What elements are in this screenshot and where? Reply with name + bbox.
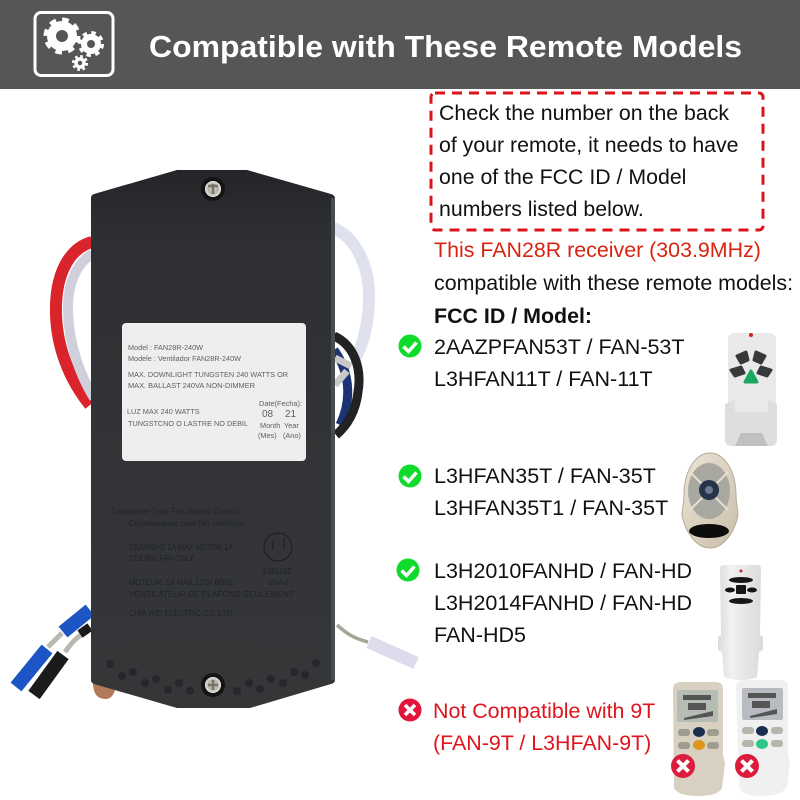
model text: L3HFAN35T1 / FAN-35T bbox=[434, 496, 668, 520]
not compatible section bbox=[398, 680, 790, 796]
receiver compatibility text: FCC ID / Model: bbox=[434, 304, 592, 328]
icon: green check bbox=[398, 464, 422, 488]
icon: red cross on white remote bbox=[735, 754, 759, 778]
receiver housing bbox=[91, 170, 335, 708]
model text: FAN-HD5 bbox=[434, 623, 526, 647]
blue lead bbox=[16, 610, 90, 687]
model text: L3H2014FANHD / FAN-HD bbox=[434, 591, 692, 615]
callout: check the number bbox=[431, 93, 763, 230]
product label bbox=[122, 323, 306, 461]
warning text: Not Compatible with 9T bbox=[433, 699, 655, 723]
model text bbox=[434, 335, 685, 391]
remote: white thermostat bbox=[736, 680, 790, 796]
white lead bbox=[337, 625, 416, 663]
moulded dots bbox=[106, 659, 320, 695]
icon: green check bbox=[398, 334, 422, 358]
receiver compatibility text: compatible with these remote models: bbox=[434, 271, 793, 295]
white wire left bbox=[68, 254, 94, 398]
product label: LUZ MAX 240 WATTS bbox=[127, 407, 200, 416]
model text: 2AAZPFAN53T / FAN-53T bbox=[434, 335, 685, 359]
icon: red cross bbox=[398, 698, 422, 722]
model text: L3HFAN35T / FAN-35T bbox=[434, 464, 656, 488]
product label: MAX. DOWNLIGHT TUNGSTEN 240 WATTS OR bbox=[128, 370, 288, 379]
product label: Modele : Ventilador FAN28R-240W bbox=[128, 354, 241, 363]
product label: (Ano) bbox=[283, 431, 301, 440]
product label: TUNGSTCNO O LASTRE NO DEBIL bbox=[128, 419, 248, 428]
model text: L3HFAN11T / FAN-11T bbox=[434, 367, 653, 391]
product photo: receiver with wires bbox=[16, 170, 416, 708]
product label: Date(Fecha): bbox=[259, 399, 302, 408]
header band bbox=[0, 0, 800, 89]
title: Compatible with These Remote Models bbox=[149, 29, 742, 64]
top screw bbox=[201, 177, 225, 201]
icon: gears bbox=[35, 12, 113, 76]
callout: check the number: one of the FCC ID / Model bbox=[439, 165, 686, 189]
blue wire behind bbox=[334, 350, 348, 425]
remote: beige thermostat bbox=[673, 682, 725, 796]
remote: oval beige bbox=[682, 453, 738, 548]
white striped wire bbox=[335, 358, 351, 385]
moulded text on housing: VENTILATEUR DE PLAFOND SEULEMENT bbox=[129, 590, 294, 599]
remote: white with holder bbox=[725, 333, 777, 446]
white wire right bbox=[333, 228, 369, 358]
product label: 08 bbox=[262, 409, 274, 420]
moulded text on housing: Condensateur pour fan ventilator bbox=[129, 519, 244, 528]
copper tab bbox=[93, 682, 115, 699]
compatible group 2 bbox=[398, 453, 738, 548]
moulded text on housing: 05AJ bbox=[268, 578, 288, 587]
warning text: (FAN-9T / L3HFAN-9T) bbox=[433, 731, 651, 755]
remote: white slim bbox=[718, 565, 763, 680]
moulded text on housing: E481562 bbox=[263, 567, 291, 576]
product label: (Mes) bbox=[258, 431, 277, 440]
moulded text on housing: CEILING FAN ONLY bbox=[129, 554, 195, 563]
product label: 21 bbox=[285, 409, 297, 420]
callout: check the number: of your remote, it needs to have bbox=[439, 133, 739, 157]
model text bbox=[434, 464, 668, 520]
callout: check the number: numbers listed below. bbox=[439, 197, 644, 221]
product label: Year bbox=[284, 421, 299, 430]
icon: red cross on beige remote bbox=[671, 754, 695, 778]
icon: green check bbox=[396, 558, 420, 582]
receiver compatibility text bbox=[434, 238, 793, 328]
UL mark bbox=[264, 533, 292, 561]
bottom screw bbox=[201, 673, 225, 697]
moulded text on housing: CHIA WEI ELECTRIC CO. LTD. bbox=[129, 609, 234, 618]
compatible group 1 bbox=[398, 333, 777, 446]
moulded text on housing: Capacitive-Type Fan Speed Control bbox=[111, 507, 239, 516]
red wire bbox=[56, 242, 92, 405]
moulded text on housing: 120V/60HZ 1A MAX MOTOR 1A bbox=[129, 543, 234, 552]
moulded text on housing: MOTEUR: 1A MAX 120V 60HZ bbox=[129, 578, 233, 587]
warning text bbox=[433, 699, 655, 755]
product label: Month bbox=[260, 421, 280, 430]
black lead bbox=[34, 627, 90, 695]
black wire bbox=[334, 336, 359, 435]
moulded text on housing bbox=[111, 507, 294, 618]
product label: MAX. BALLAST 240VA NON-DIMMER bbox=[128, 381, 255, 390]
receiver compatibility text: This FAN28R receiver (303.9MHz) bbox=[434, 238, 761, 262]
model text: L3H2010FANHD / FAN-HD bbox=[434, 559, 692, 583]
product label: Model : FAN28R-240W bbox=[128, 343, 203, 352]
compatible group 3 bbox=[396, 558, 763, 680]
model text bbox=[434, 559, 692, 647]
callout: check the number: Check the number on the back bbox=[439, 101, 729, 125]
